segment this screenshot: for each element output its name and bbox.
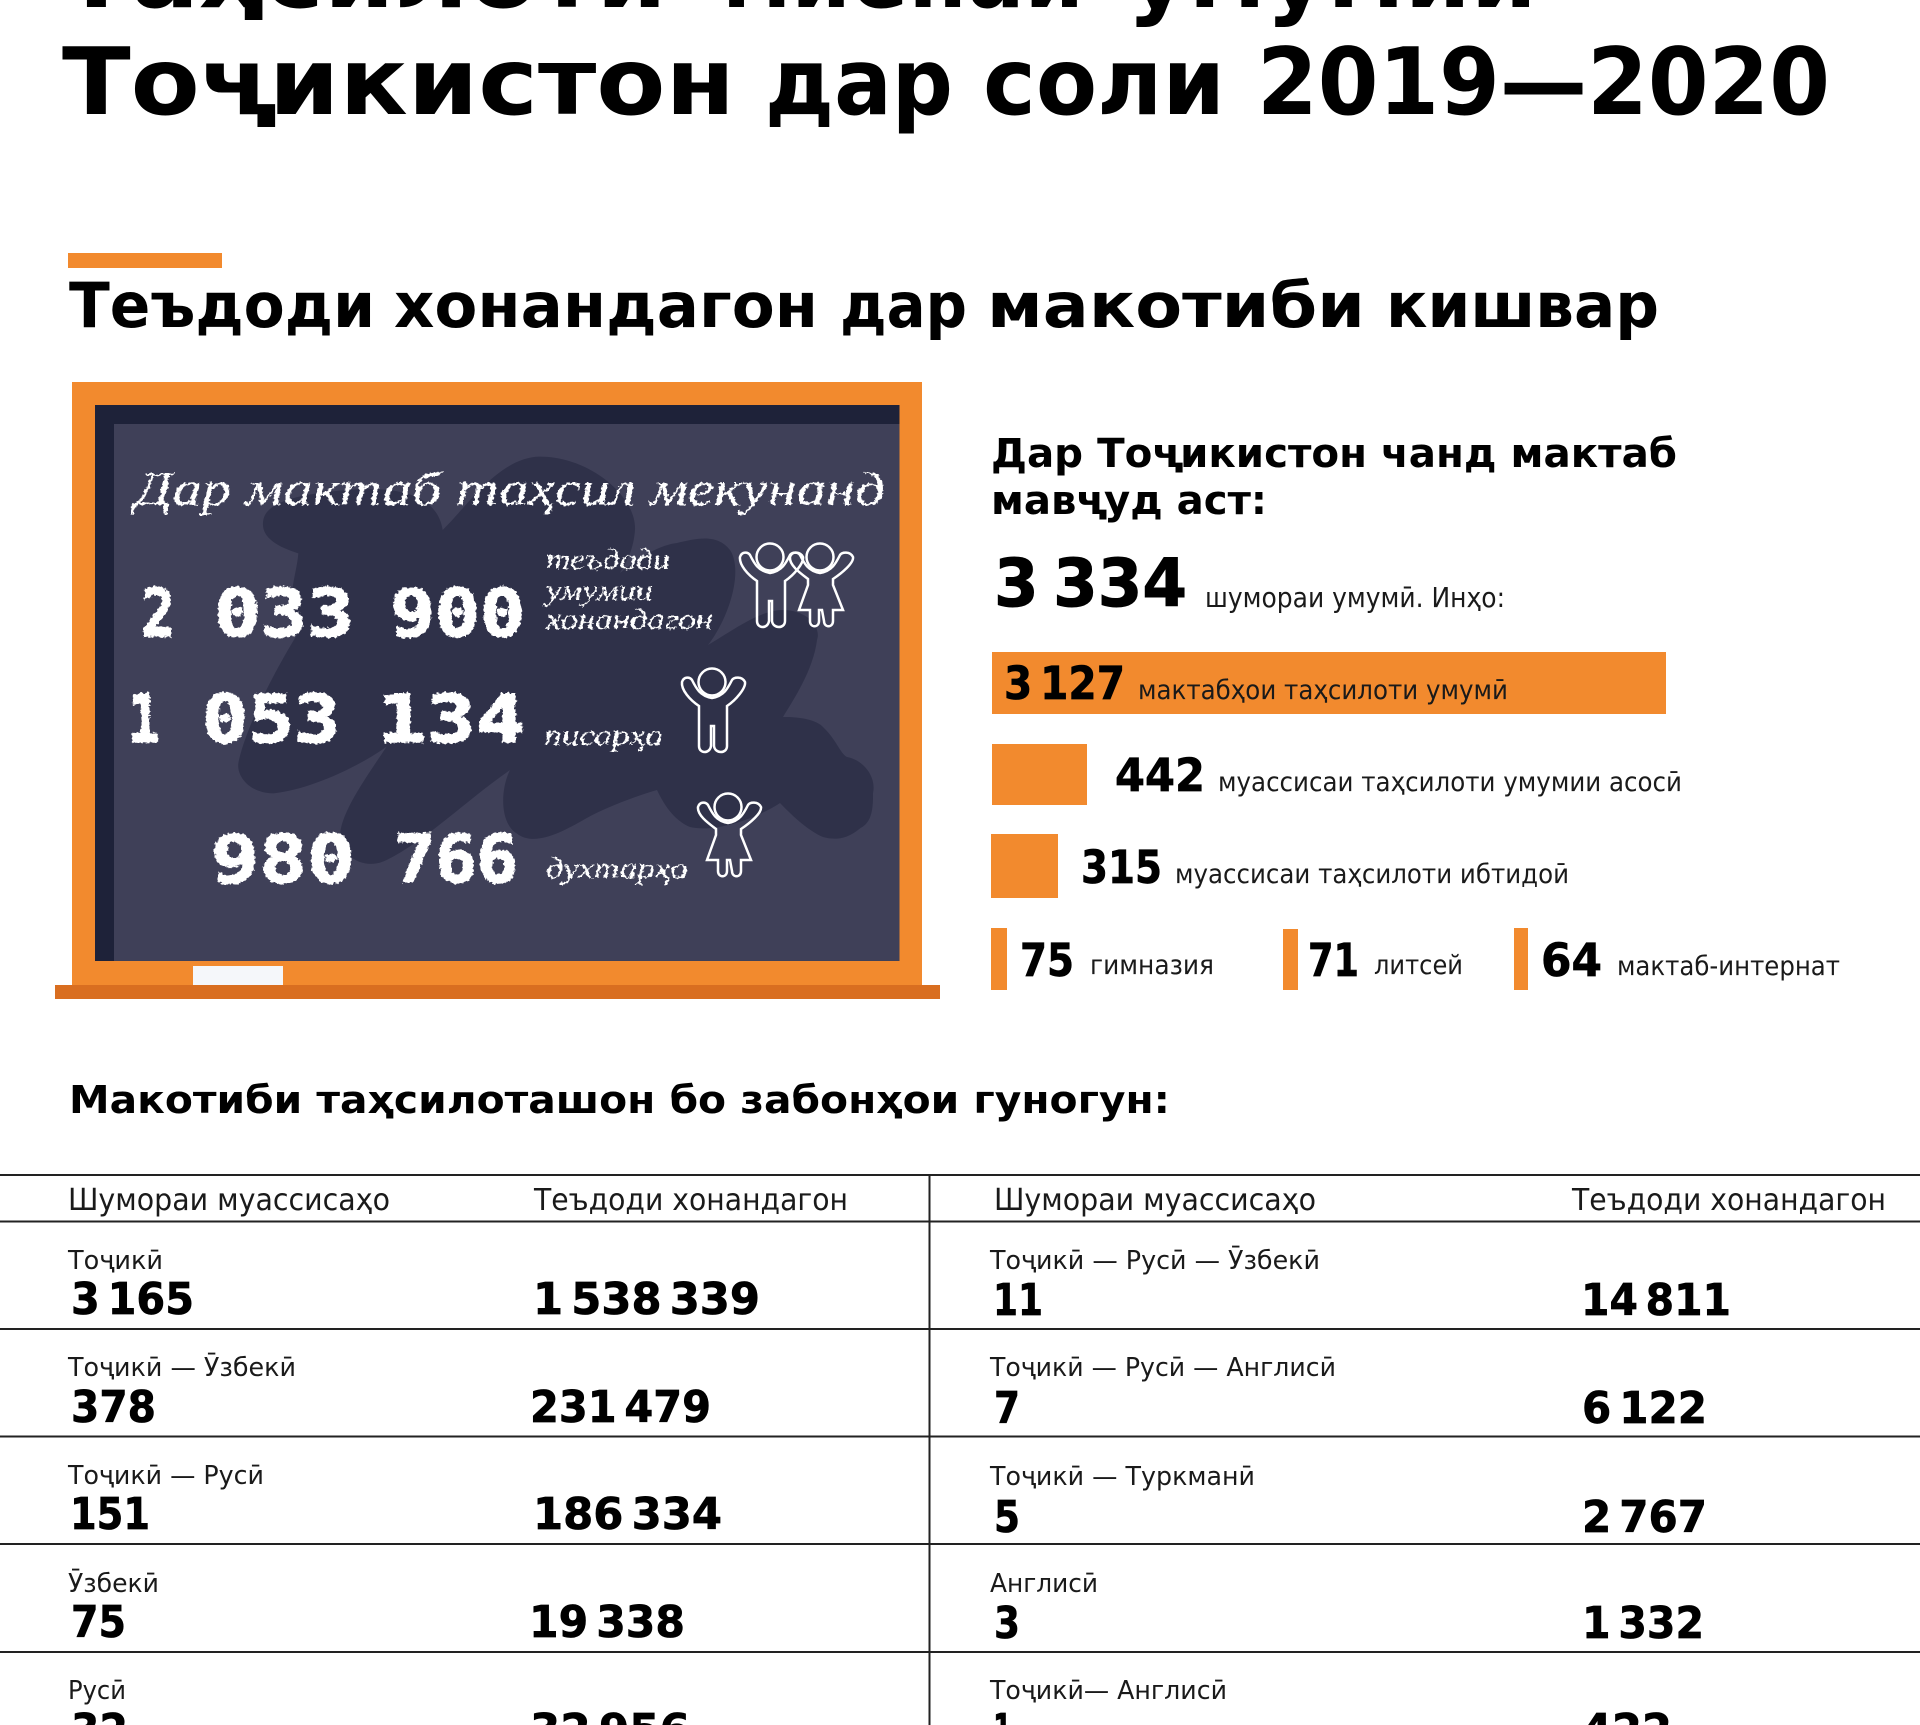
row: English: Англисӣ (990, 1569, 1098, 1599)
section heading (69, 269, 1659, 342)
row: Tajik-Russian-English: Тоҷикӣ — Русӣ — Англисӣ (989, 1353, 1336, 1383)
heading accent bar (68, 253, 222, 268)
title: соли (983, 28, 1225, 136)
row: Tajik-Uzbek: Тоҷикӣ — Ӯзбекӣ (67, 1352, 296, 1383)
table heading: Макотиби таҳсилоташон бо забонҳои гуногун: (69, 1078, 1170, 1122)
row: Tajik-Russian (67, 1461, 722, 1540)
row: Tajik-Uzbek: 231 479 (530, 1382, 711, 1433)
chalk heading: Дар мактаб таҳсил мекунанд (130, 463, 885, 516)
panel: school counts (991, 431, 1840, 990)
row: Tajik-English (989, 1676, 1672, 1725)
row: Tajik-Russian-English (989, 1353, 1707, 1434)
bar: general education schools: 3 127 (1004, 657, 1125, 710)
row: Tajik-Russian-Uzbek (989, 1245, 1731, 1326)
title (62, 0, 1830, 136)
row: Tajik-Russian-English: 7 (994, 1383, 1020, 1434)
row: English (990, 1569, 1704, 1649)
bar: general education schools: мактабҳои таҳсилоти умумӣ (1138, 675, 1508, 706)
row: Tajik-Russian: 186 334 (533, 1489, 722, 1540)
chalk stat: boys: писарҳо (544, 719, 663, 752)
row: English: 1 332 (1582, 1598, 1704, 1649)
table header row: Шумораи муассисаҳо (68, 1183, 390, 1218)
bar: primary education: 315 (1081, 841, 1162, 894)
total schools (994, 545, 1505, 622)
row: Tajik-Russian-Uzbek: 14 811 (1581, 1275, 1731, 1326)
row: Uzbek: Ӯзбекӣ (68, 1568, 159, 1599)
board frame (72, 382, 922, 985)
icon: girl (698, 794, 761, 876)
table header row: Шумораи муассисаҳо (994, 1183, 1316, 1218)
total schools: шумораи умумӣ. Инҳо: (1205, 581, 1505, 614)
chalk stat: total students: теъдоди (546, 543, 670, 576)
row: English: 3 (994, 1598, 1020, 1649)
row: Tajik-Russian-English: 6 122 (1582, 1383, 1707, 1434)
row: Russian (68, 1676, 690, 1725)
chalk stat: total students: 2 (141, 575, 175, 652)
school counts heading: мавҷуд аст: (991, 478, 1267, 524)
bar: lyceums (1283, 929, 1463, 990)
row: Tajik: 3 165 (71, 1274, 194, 1325)
title: дар (765, 28, 953, 136)
bar: gymnasiums (991, 928, 1214, 990)
table header row: Теъдоди хонандагон (1571, 1183, 1886, 1218)
bar: boarding schools (1514, 928, 1840, 990)
bar: primary education: муассисаи таҳсилоти ибтидоӣ (1175, 859, 1569, 890)
section heading: макотиби (987, 269, 1365, 342)
title: Тоҷикистон (62, 28, 735, 136)
chalk stat: boys: 1 (128, 681, 160, 758)
table: languages of instruction (0, 1175, 1920, 1725)
chalk stat: girls: 980 (211, 821, 355, 898)
section heading: дар (840, 269, 967, 342)
row: Uzbek: 75 (71, 1597, 126, 1648)
chalk stat: girls: духтарҳо (546, 852, 688, 885)
table header row: Теъдоди хонандагон (533, 1183, 848, 1218)
row: Tajik-Turkmen: Тоҷикӣ — Туркманӣ (989, 1462, 1255, 1492)
row: Tajik-Uzbek: 378 (71, 1382, 156, 1433)
bar: lyceums: литсей (1374, 950, 1463, 981)
chalk stat: total students: хонандагон (545, 603, 713, 636)
chalk stat: boys: 134 (377, 681, 525, 758)
chalk stat: girls: 766 (394, 821, 518, 898)
section heading: кишвар (1386, 269, 1659, 342)
row: Tajik: Тоҷикӣ (67, 1246, 163, 1276)
icon: boy (682, 668, 745, 752)
bar: basic general education (992, 744, 1682, 805)
row: Tajik (67, 1246, 760, 1325)
school counts heading (991, 431, 1677, 524)
section heading: Теъдоди (69, 269, 375, 342)
row: Tajik-Turkmen: 2 767 (1582, 1492, 1707, 1543)
chalk stat: total students: 900 (390, 575, 525, 652)
board tray (55, 985, 940, 999)
icon: boy and girl (740, 544, 853, 627)
chalk stat: girls (211, 821, 688, 898)
row: Russian: Русӣ (68, 1676, 126, 1706)
chalk stat: total students: умумии (543, 574, 653, 607)
bar: general education schools (992, 652, 1666, 714)
chalk piece (193, 966, 283, 985)
school counts heading: Дар Тоҷикистон чанд мактаб (991, 431, 1677, 477)
bar: primary education (991, 834, 1569, 898)
row: Tajik-Russian-Uzbek: 11 (993, 1275, 1043, 1326)
chalk stat: total students (141, 543, 713, 652)
bar: lyceums: 71 (1308, 934, 1359, 987)
bar: gymnasiums: гимназия (1090, 950, 1214, 981)
table header row (68, 1183, 1886, 1218)
board surface (95, 405, 900, 961)
section heading: хонандагон (394, 269, 818, 342)
row: Uzbek (68, 1568, 685, 1648)
row: Tajik-Russian: Тоҷикӣ — Русӣ (67, 1461, 264, 1491)
chalk stat: boys (128, 681, 663, 758)
row: Tajik: 1 538 339 (533, 1274, 760, 1325)
row: Tajik-Uzbek (67, 1352, 711, 1433)
bar: boarding schools: мактаб-интернат (1617, 951, 1840, 982)
row: Tajik-Russian: 151 (70, 1489, 150, 1540)
bar: gymnasiums: 75 (1020, 934, 1074, 987)
chalk stat: boys: 053 (202, 681, 340, 758)
bar: boarding schools: 64 (1541, 934, 1602, 987)
bar: basic general education: 442 (1115, 749, 1205, 802)
title: 2019—2020 (1257, 28, 1830, 136)
bar: basic general education: муассисаи таҳсилоти умумии асосӣ (1218, 767, 1682, 798)
chalk stat: total students: 033 (214, 575, 354, 652)
row: Tajik-Turkmen (989, 1462, 1707, 1543)
panel: chalkboard (55, 382, 940, 999)
row: Tajik-English: Тоҷикӣ— Англисӣ (989, 1676, 1227, 1706)
total schools: 3 334 (994, 545, 1187, 622)
row: Tajik-Russian-Uzbek: Тоҷикӣ — Русӣ — Ӯзбекӣ (989, 1245, 1320, 1276)
row: Tajik-Turkmen: 5 (994, 1492, 1020, 1543)
row: Uzbek: 19 338 (529, 1597, 685, 1648)
